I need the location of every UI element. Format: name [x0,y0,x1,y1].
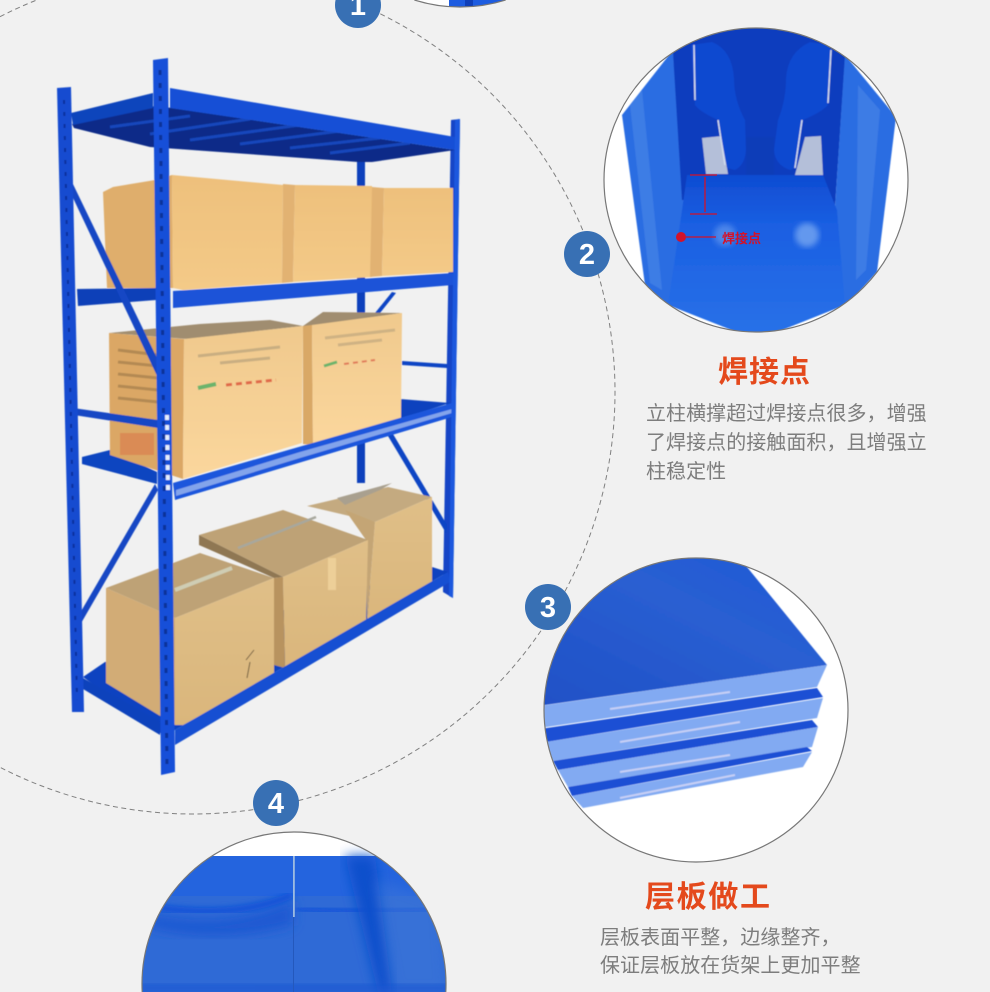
keyhole slots [691,42,831,175]
front plate [668,175,845,340]
weld dimension marks [686,175,717,237]
detail circle 3: shelf boards [530,556,848,862]
board 1 [540,665,827,728]
dark strip 1 [540,688,823,743]
top row box 2 [282,184,372,283]
board 2 [540,698,823,761]
shelf 2 left [77,288,156,306]
text: shelf board description [600,926,861,977]
shelf 3 deck [400,399,450,419]
front upright [153,58,175,775]
dark strip 3 [568,747,812,796]
text: weld point description: 了焊接点的接触面积，且增强立 [646,431,927,454]
lower box 3 [307,483,432,622]
heading: shelf board craftsmanship: 层板做工 [645,881,770,914]
shelf 2 front beam [173,273,453,308]
left column [622,50,684,310]
badge 2 [564,231,610,277]
right upright front strip [449,119,460,598]
right upright [443,119,460,598]
left back upright [57,87,84,712]
badge 2: 2 [579,239,595,271]
detail circle 1 [414,0,506,8]
weld dot [676,232,686,242]
text: shelf board description: 层板表面平整，边缘整齐， [600,926,841,949]
middle box right [303,312,402,445]
lower box 1 [106,553,274,725]
heading: weld point: 焊接点 [718,356,810,389]
silver weld patches [702,136,823,175]
top sheet [530,556,827,707]
text: shelf board description: 保证层板放在货架上更加平整 [600,954,861,977]
badge 3 [525,584,571,630]
badge 4: 4 [268,788,284,820]
text: weld point description: 柱稳定性 [646,460,726,483]
lower box 2 [199,510,368,668]
shelf 3 front beam [173,403,452,500]
back upright [357,160,365,483]
detail circle 2: weld point [604,20,908,340]
detail circle 4: board surface [140,832,450,992]
top row box 1 [103,175,283,290]
badge 4 [253,780,299,826]
right diagonal braces [375,292,447,533]
top shelf beams [71,88,455,150]
badge 1 [335,0,381,28]
bottom shelf deck [83,567,448,733]
bottom shelf beams [78,572,450,745]
weld label: 焊接点 [722,231,761,246]
badge 3: 3 [540,592,556,624]
dashed connector circle [0,0,615,814]
shelf 3 left [82,450,157,484]
left braces [66,180,158,625]
dark strip 2 [553,720,818,770]
board 4 [572,752,812,808]
text: weld point description [646,402,927,483]
top shelf underside [72,106,455,162]
inner channel [673,20,845,207]
middle box left [109,320,303,479]
text: weld point description: 立柱横撑超过焊接点很多，增强 [646,402,927,425]
right column [835,55,896,310]
top row box 3 [370,187,453,277]
board 3 [558,727,818,787]
shelving rack photo [57,58,460,775]
